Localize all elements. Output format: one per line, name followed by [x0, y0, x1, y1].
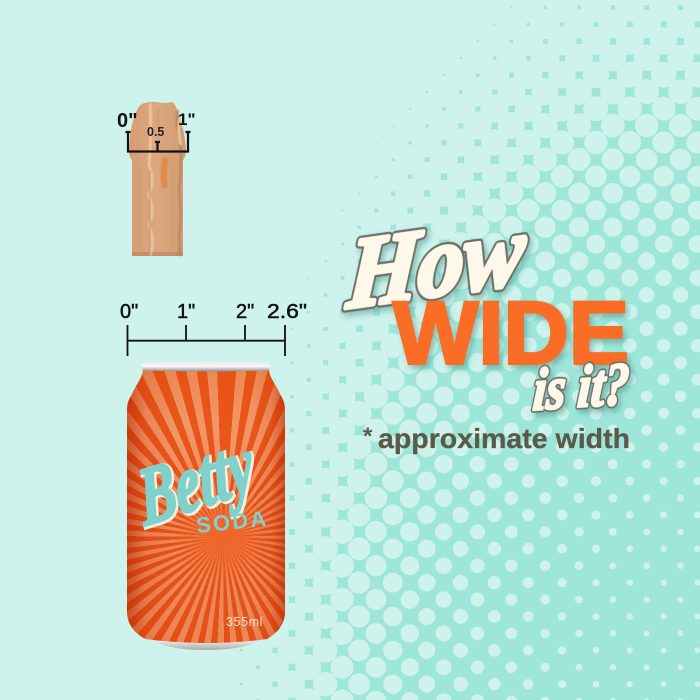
can ruler line and ticks [128, 325, 285, 356]
can logo: Betty [131, 417, 262, 545]
can logo: Betty: Betty [131, 417, 260, 544]
can body with sunburst [127, 361, 285, 651]
peg ruler bracket [126, 132, 190, 152]
footnote: approximate width: * [363, 423, 373, 450]
title: How: How [344, 192, 529, 330]
can volume: 355ml: 355ml [226, 615, 263, 629]
can ruler label 1 inch: 1" [177, 301, 195, 323]
wooden peg [129, 102, 186, 256]
title: WIDE: WIDE [393, 282, 629, 382]
title: is it?: is it? [531, 350, 631, 424]
can logo: Betty: Betty [133, 418, 262, 545]
can top: silver rim [142, 362, 270, 372]
soda can [127, 362, 285, 650]
title: How: How [344, 192, 529, 330]
footnote: approximate width: approximate width [378, 423, 630, 454]
can ruler [120, 301, 307, 356]
peg ruler label 0 inch: 0" [117, 110, 138, 132]
can ruler label 0 inch: 0" [120, 301, 138, 323]
peg ruler label 0.5: 0.5 [147, 125, 164, 139]
peg ruler [117, 110, 196, 152]
can ruler label 2 inch: 2" [236, 301, 254, 323]
peg ruler label 1 inch: 1" [178, 110, 196, 129]
can base: silver bottom rim [153, 640, 259, 650]
title: is it?: is it? [531, 350, 631, 424]
can ruler label 2.6 inch: 2.6" [267, 301, 307, 323]
can logo: SODA: SODA [195, 506, 267, 538]
